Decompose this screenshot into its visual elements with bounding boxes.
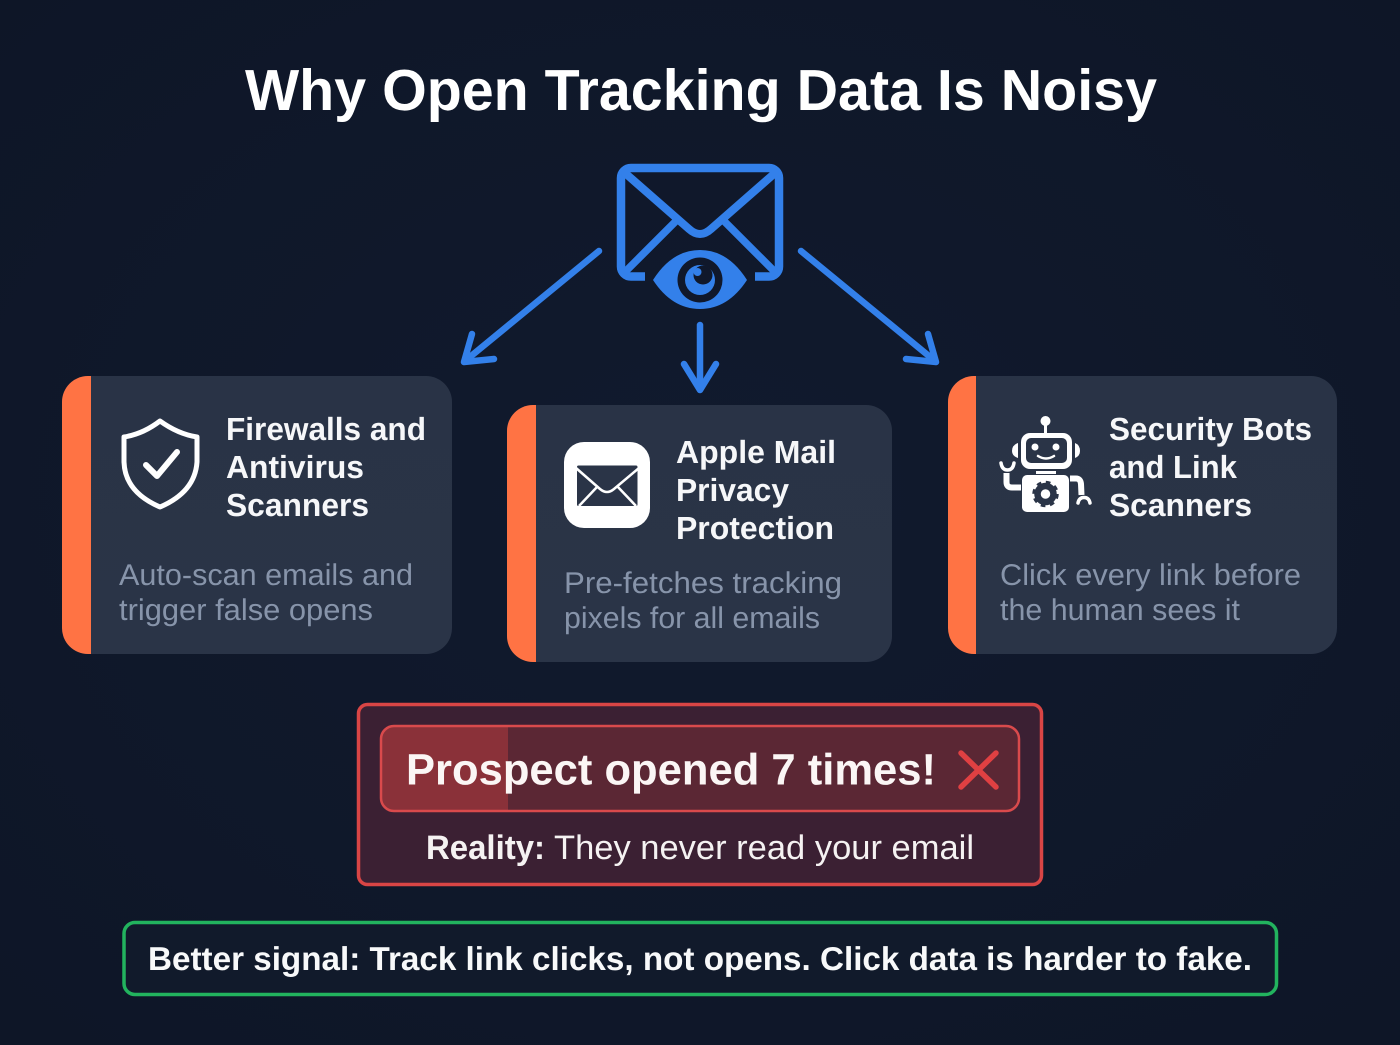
icon: red x (961, 753, 996, 787)
arrow: to security bots (801, 251, 936, 362)
heading: Apple Mail (676, 434, 836, 470)
arrow: to firewalls (464, 251, 599, 362)
heading: Protection (676, 510, 834, 546)
description: Auto-scan emails and (119, 559, 413, 592)
icon: robot (1001, 416, 1090, 512)
heading (676, 434, 836, 546)
description (564, 567, 842, 635)
panel: firewalls and antivirus scanners (62, 376, 452, 654)
description: Pre-fetches tracking (564, 567, 842, 600)
icon: shield (124, 421, 197, 507)
notification bar (381, 726, 1019, 811)
description: Click every link before (1000, 559, 1301, 592)
title: Why Open Tracking Data Is Noisy (245, 58, 1157, 123)
heading: Firewalls and (226, 411, 426, 447)
notification bar: Prospect opened 7 times! (406, 746, 936, 794)
heading (1109, 411, 1312, 523)
heading: and Link (1109, 449, 1237, 485)
description (1000, 559, 1301, 627)
description: trigger false opens (119, 594, 373, 627)
arrow: to apple mail (684, 325, 716, 390)
panel: false open warning (358, 704, 1042, 884)
reality text: Reality: (426, 829, 545, 867)
heading: Security Bots (1109, 411, 1312, 447)
panel: apple mail privacy protection (507, 405, 892, 662)
description: the human sees it (1000, 594, 1241, 627)
callout: better signal: Better signal: Track link clicks, not opens. Click data is harder to fake. (148, 940, 1252, 977)
description (119, 559, 413, 627)
heading: Scanners (1109, 487, 1252, 523)
description: pixels for all emails (564, 602, 820, 635)
icon: envelope with eye (621, 168, 779, 309)
heading (226, 411, 426, 523)
heading: Scanners (226, 487, 369, 523)
panel: security bots and link scanners (948, 376, 1337, 654)
heading: Antivirus (226, 449, 364, 485)
icon: mail app (564, 442, 650, 528)
callout: better signal (124, 922, 1276, 994)
reality text: They never read your email (554, 829, 974, 867)
heading: Privacy (676, 472, 789, 508)
